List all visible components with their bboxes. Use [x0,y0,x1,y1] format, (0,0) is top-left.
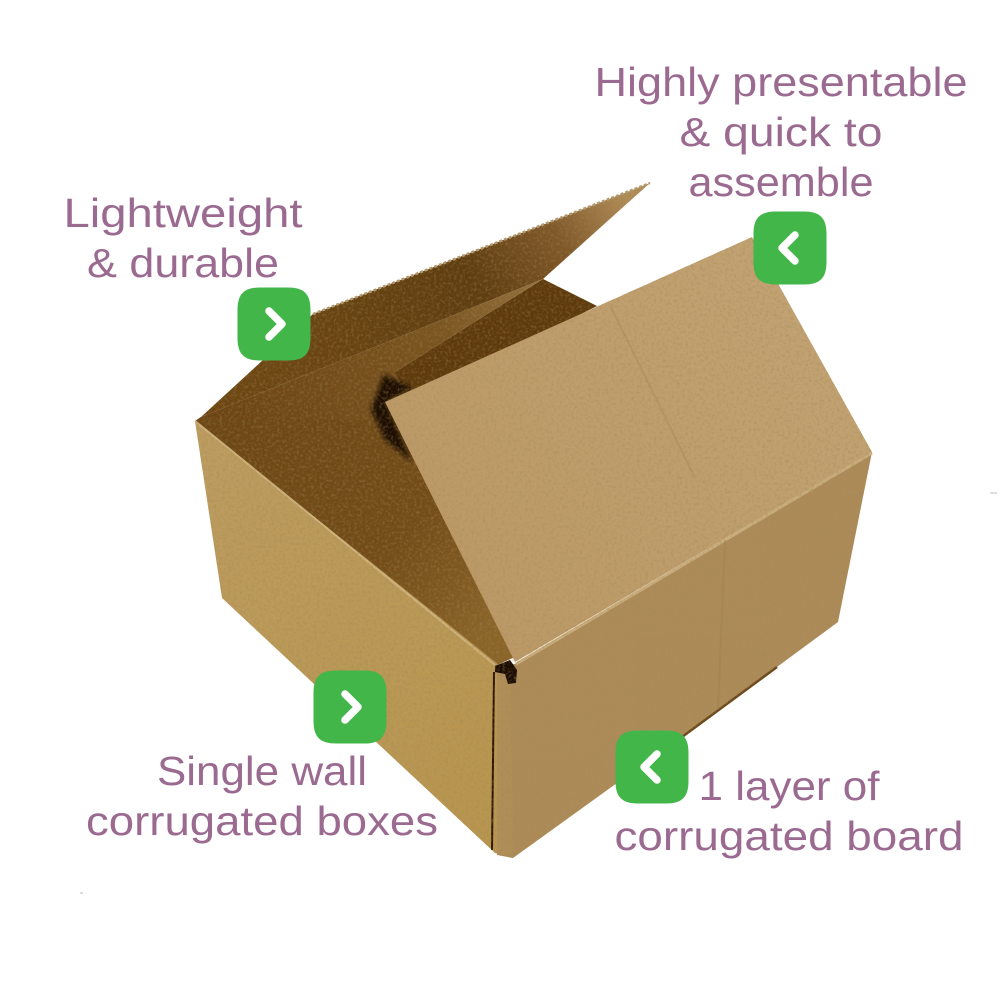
label: 1 layer [614,763,964,859]
label: lightweight and durable: Lightweight [64,190,303,236]
label: lightweight and durable [64,190,303,286]
label: lightweight and durable: & durable [87,240,279,286]
infographic canvas [67,66,997,894]
icon: left arrow badge bottom right [616,730,688,804]
vertical corner tab [497,672,513,858]
icon: right arrow badge bottom left [314,670,386,744]
label: highly presentable: assemble [688,159,874,205]
back flap, raised [201,183,650,417]
flap crease [610,305,695,478]
label: single wall: corrugated boxes [86,798,438,844]
speck left [80,892,83,894]
corrugated edge of back flap [313,183,650,314]
label: highly presentable: Highly presentable [594,59,968,105]
face crease [718,540,725,710]
cardboard grain [190,180,880,865]
cardboard box [190,180,880,865]
inner side flap [195,279,543,665]
front top flap [385,237,872,662]
corner notch [495,660,517,684]
label: highly presentable: & quick to [680,109,882,155]
fold highlight [516,453,872,664]
label: 1 layer: corrugated board [614,813,964,859]
icon: left arrow badge top right [754,212,826,284]
label: single wall: Single wall [157,748,367,794]
speck right [990,492,997,494]
label: 1 layer: 1 layer of [698,763,880,809]
label: highly presentable [594,59,968,205]
dark gap behind front flap [371,374,412,462]
interior back wall [385,279,597,402]
right box face [497,452,872,858]
label: single wall [86,748,438,844]
inner shadow area [195,417,530,665]
left top edge highlight [195,421,495,665]
under-edge shadow [682,667,777,737]
icon: right arrow badge top left [238,288,310,360]
left box face [195,421,499,854]
corner seam [492,672,494,850]
